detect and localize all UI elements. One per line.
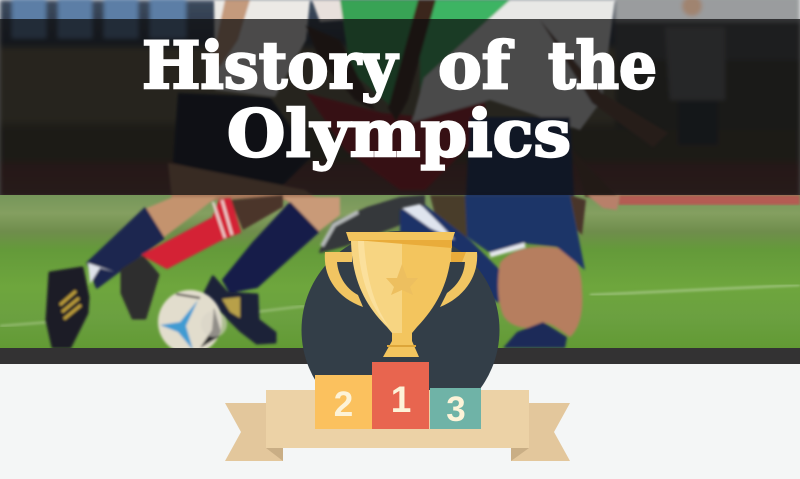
dark divider bar	[0, 348, 800, 364]
right player shorts and thigh	[400, 195, 620, 348]
dark title band	[0, 19, 800, 195]
photo: football players running	[0, 0, 800, 354]
podium second place: 2	[334, 385, 353, 424]
podium third place: 3	[446, 390, 466, 429]
running track	[618, 195, 800, 205]
title	[142, 28, 657, 172]
trophy	[325, 232, 477, 357]
players upper bodies	[168, 0, 668, 200]
star	[386, 264, 418, 295]
podium third place	[430, 388, 481, 429]
title: History	[142, 28, 399, 104]
ribbon	[225, 390, 570, 461]
podium second place	[315, 375, 372, 429]
icon: trophy on podium with ribbon	[225, 231, 570, 461]
title: the	[548, 28, 657, 104]
podium first place: 1	[391, 379, 411, 420]
podium first place	[372, 362, 429, 429]
football	[158, 290, 227, 354]
pitch line	[590, 285, 800, 295]
title: of	[438, 28, 514, 104]
dark circle	[302, 231, 500, 429]
player legs and boots	[47, 195, 424, 347]
grass	[0, 195, 800, 348]
stadium background	[0, 0, 800, 197]
title: Olympics	[227, 96, 571, 172]
